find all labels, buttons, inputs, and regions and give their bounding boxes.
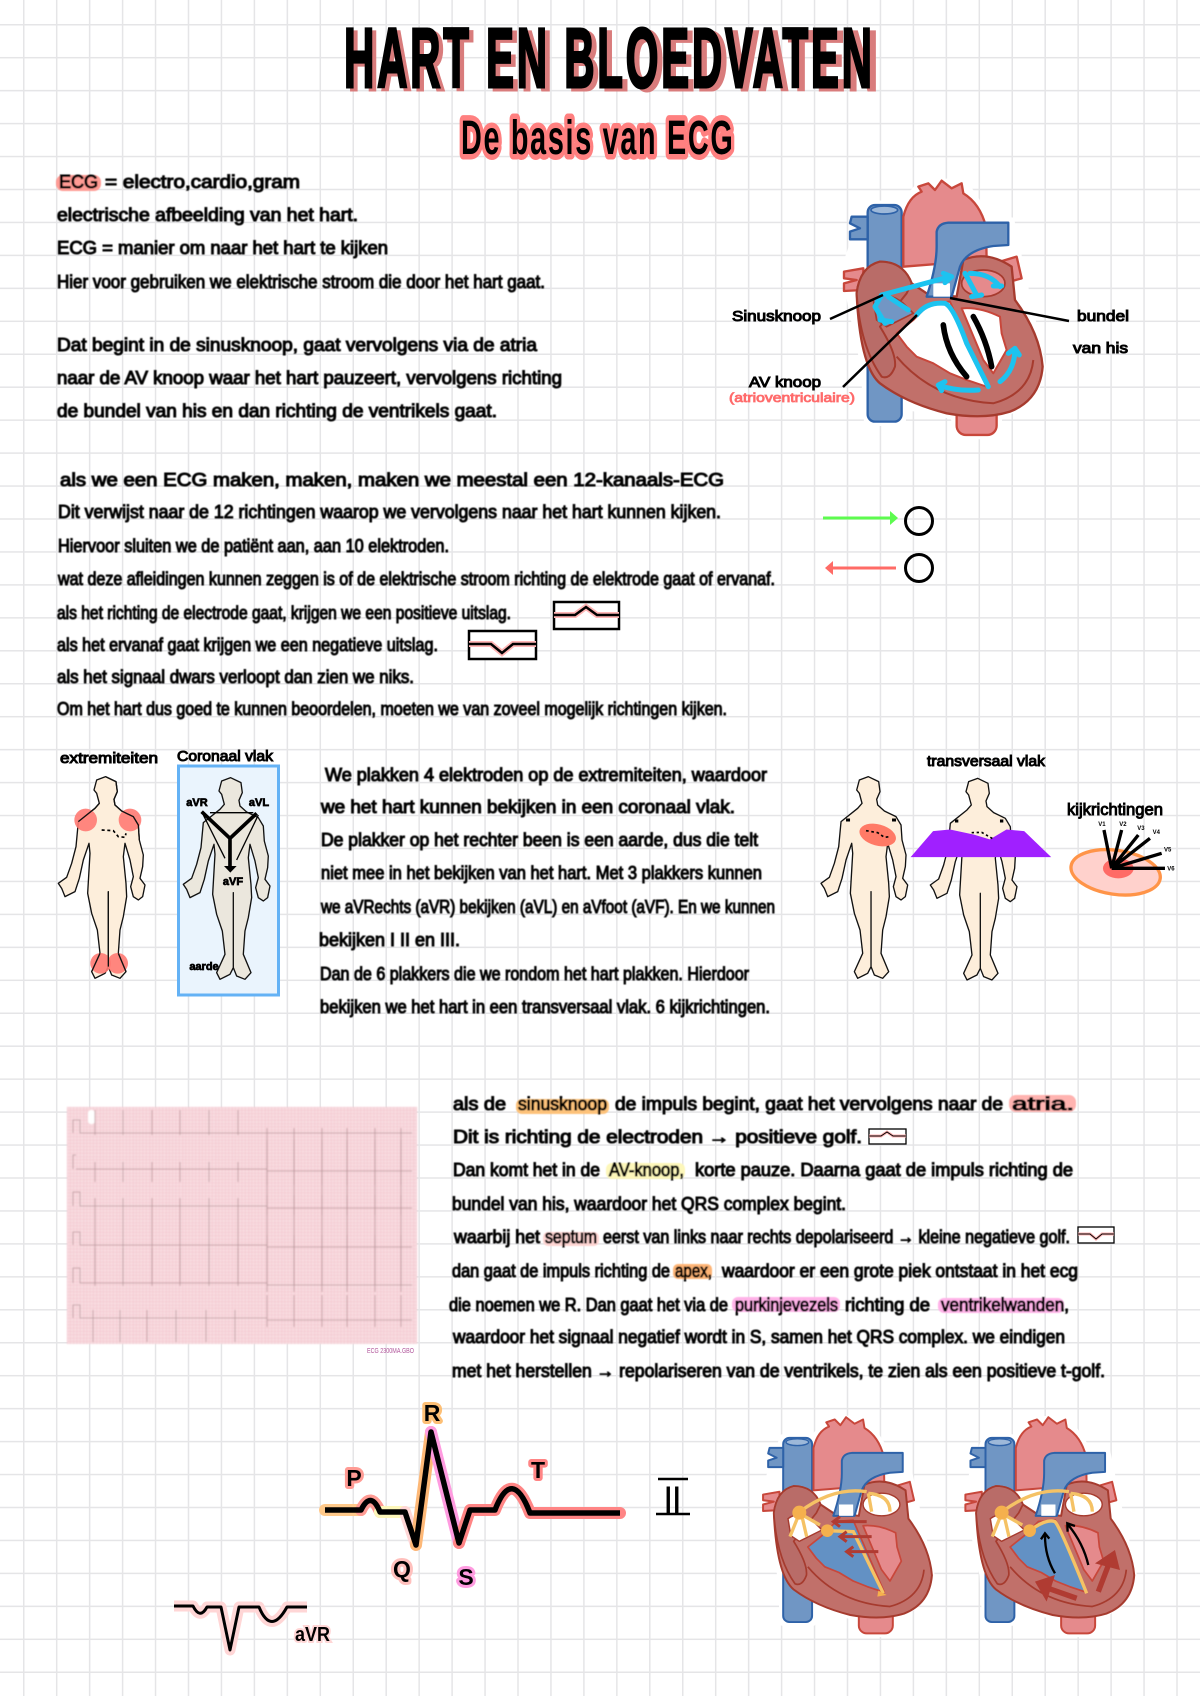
- text block: conduction explanation: richting de: [845, 1295, 930, 1315]
- label: AV knoop: AV knoop: [749, 374, 821, 391]
- label: Q: Q: [393, 1556, 411, 1582]
- text block: electrodes explanation: we het hart kunnen bekijken in een coronaal vlak.: [320, 797, 735, 817]
- text block: what is an ECG: electrische afbeelding van het hart.: [57, 205, 358, 225]
- text block: 12-lead ECG: als het ervanaf gaat krijgen we een negatieve uitslag.: [57, 635, 438, 655]
- icon: small positive deflection: [869, 1129, 906, 1144]
- text block: electrodes explanation: We plakken 4 elektroden op de extremiteiten, waardoor: [325, 765, 767, 785]
- text block: conduction explanation: ventrikelwanden,: [941, 1295, 1069, 1315]
- red septal arrows: [833, 1517, 878, 1557]
- text block: what is an ECG: de bundel van his en dan richting de ventrikels gaat.: [57, 401, 497, 421]
- text block: what is an ECG: ECG: [59, 172, 98, 192]
- text block: what is an ECG: Dat begint in de sinusknoop, gaat vervolgens via de atria: [57, 335, 538, 355]
- label: lead II: [656, 1479, 690, 1522]
- text block: electrodes explanation: bekijken I II en III.: [319, 930, 460, 950]
- text block: 12-lead ECG: Om het hart dus goed te kunnen beoordelen, moeten we van zoveel mogelijk richtingen kijken.: [57, 699, 727, 719]
- highlight: ECG: [56, 175, 101, 191]
- wave highlights: [325, 1432, 620, 1545]
- text block: conduction explanation: de impuls begint, gaat het vervolgens naar de: [615, 1094, 1003, 1114]
- text block: what is an ECG: [56, 172, 562, 421]
- panel: coronal plane: [177, 748, 278, 995]
- figure: body with transverse plane: [912, 778, 1050, 980]
- text block: what is an ECG: naar de AV knoop waar het hart pauzeert, vervolgens richting: [57, 368, 562, 388]
- label: S: S: [458, 1564, 474, 1590]
- text block: 12-lead ECG: Dit verwijst naar de 12 richtingen waarop we vervolgens naar het hart kunnen kijken.: [58, 502, 721, 522]
- text block: what is an ECG: Hier voor gebruiken we elektrische stroom die door het hart gaat.: [57, 272, 545, 292]
- text block: conduction explanation: apex,: [675, 1261, 712, 1281]
- text block: conduction explanation: AV-knoop,: [609, 1160, 684, 1180]
- subtitle: De basis van ECG: [461, 112, 733, 165]
- figure: body with heart location: [821, 777, 908, 978]
- labels: aVR aVL aVF aarde: aarde: [189, 961, 219, 973]
- text block: electrodes explanation: we aVRechts (aVR) bekijken (aVL) en aVfoot (aVF). En we kunnen: [320, 897, 775, 917]
- illustration: heart depolarising septum: [762, 1417, 932, 1635]
- text block: conduction explanation: waardoor er een grote piek ontstaat in het ecg: [721, 1261, 1078, 1281]
- label: bundel van his: van his: [1073, 340, 1128, 357]
- black arrows: [1041, 1523, 1088, 1573]
- labels: aVR aVL aVF aarde: [186, 797, 269, 973]
- text block: 12-lead ECG: wat deze afleidingen kunnen zeggen is of de elektrische stroom richting de elektrode gaat of ervanaf.: [57, 569, 775, 589]
- heading: extremiteiten: extremiteiten: [60, 750, 158, 767]
- text block: 12-lead ECG: als het signaal dwars verloopt dan zien we niks.: [57, 667, 414, 687]
- red wall arrows: [1043, 1557, 1112, 1598]
- text block: conduction explanation: korte pauze. Daarna gaat de impuls richting de: [695, 1160, 1073, 1180]
- conduction arrows: [875, 273, 1019, 391]
- labels: aVR aVL aVF aarde: aVF: [223, 876, 243, 888]
- text block: what is an ECG: = electro,cardio,gram: [105, 172, 300, 192]
- text block: 12-lead ECG: als we een ECG maken, maken, maken we meestal een 12-kanaals-ECG: [60, 470, 724, 490]
- illustration: heart with conduction pathway: [843, 180, 1043, 437]
- icon: red arrow away from electrode: [825, 554, 932, 582]
- text block: electrodes explanation: De plakker op het rechter been is een aarde, dus die telt: [321, 830, 758, 850]
- label: lead II: II: [664, 1480, 681, 1522]
- text block: conduction explanation: dan gaat de impuls richting de: [452, 1261, 670, 1281]
- text block: conduction explanation: waardoor het signaal negatief wordt in S, samen het QRS complex. we eindigen: [452, 1327, 1065, 1347]
- chart: PQRST wave lead II: [325, 1400, 620, 1590]
- illustration: heart depolarising ventricle walls: [965, 1417, 1135, 1635]
- text block: conduction explanation: septum: [545, 1227, 597, 1247]
- icon: negative deflection box: [469, 631, 536, 659]
- text block: electrodes explanation: niet mee in het bekijken van het hart. Met 3 plakkers kunnen: [321, 863, 762, 883]
- text block: conduction explanation: waarbij het: [453, 1227, 540, 1247]
- title: HART EN BLOEDVATEN: [348, 15, 878, 109]
- text block: conduction explanation: purkinjevezels: [735, 1295, 838, 1315]
- label: aVR: aVR: [295, 1624, 331, 1646]
- figure: body with limb electrodes: [58, 777, 145, 978]
- text block: conduction explanation: sinusknoop: [518, 1094, 607, 1114]
- black arrows: [943, 317, 992, 377]
- chart: 12-lead ECG strip: [67, 1107, 417, 1344]
- caption: ECG source: ECG 2300MA.GBO: [367, 1348, 414, 1355]
- heading: transversaal vlak: transversaal vlak: [927, 753, 1046, 770]
- highlights: [516, 1095, 1076, 1313]
- text block: conduction explanation: [449, 1094, 1105, 1381]
- diagram: chest leads directions: V2: [1119, 822, 1127, 828]
- diagram: chest leads directions: V3: [1137, 826, 1145, 832]
- diagram: chest leads directions: V5: [1164, 848, 1172, 854]
- label: AV knoop: [729, 374, 855, 405]
- icon: positive deflection box: [554, 602, 619, 629]
- icon: small negative deflection: [1078, 1227, 1114, 1243]
- diagram: chest leads directions: V4: [1153, 830, 1161, 836]
- chart: aVR wave: [174, 1606, 331, 1650]
- text block: conduction explanation: atria.: [1012, 1094, 1074, 1114]
- label: bundel van his: [1073, 308, 1129, 357]
- figure: body with limb leads: [183, 778, 270, 979]
- labels: aVR aVL aVF aarde: aVR: [186, 797, 208, 809]
- heading: Coronaal vlak: Coronaal vlak: [177, 748, 274, 765]
- text block: conduction explanation: als de: [453, 1094, 506, 1114]
- text block: electrodes explanation: [319, 765, 775, 1017]
- text block: conduction explanation: met het herstellen → repolariseren van de ventrikels, te zien als een positieve t-golf.: [452, 1361, 1105, 1381]
- label: R: R: [424, 1400, 441, 1426]
- title: HART EN BLOEDVATEN: [344, 12, 872, 106]
- text block: conduction explanation: eerst van links naar rechts depolariseerd → kleine negatieve golf.: [603, 1227, 1070, 1247]
- label: T: T: [531, 1457, 545, 1483]
- text block: electrodes explanation: Dan de 6 plakkers die we rondom het hart plakken. Hierdoor: [320, 964, 749, 984]
- diagram: chest leads directions: V6: [1167, 867, 1175, 873]
- text block: conduction explanation: Dan komt het in de: [453, 1160, 600, 1180]
- labels: aVR aVL aVF aarde: aVL: [249, 797, 269, 809]
- text block: electrodes explanation: bekijken we het hart in een transversaal vlak. 6 kijkrichtingen.: [320, 997, 770, 1017]
- icon: green arrow towards electrode: [823, 508, 932, 534]
- label: AV knoop: (atrioventriculaire): [729, 390, 855, 405]
- label: bundel van his: bundel: [1077, 308, 1129, 325]
- diagram: chest leads directions: [1068, 822, 1175, 900]
- text block: what is an ECG: ECG = manier om naar het hart te kijken: [57, 238, 388, 258]
- label: Sinusknoop: Sinusknoop: [732, 308, 821, 325]
- text block: 12-lead ECG: als het richting de electrode gaat, krijgen we een positieve uitslag.: [57, 603, 511, 623]
- text block: conduction explanation: bundel van his, waardoor het QRS complex begint.: [452, 1194, 846, 1214]
- text block: conduction explanation: Dit is richting de electroden → positieve golf.: [453, 1127, 862, 1147]
- wave line: [325, 1432, 620, 1545]
- heart labels: [729, 295, 1129, 405]
- label: P: P: [346, 1465, 362, 1491]
- heading: kijkrichtingen: kijkrichtingen: [1067, 800, 1163, 819]
- text block: 12-lead ECG: Hiervoor sluiten we de patiënt aan, aan 10 elektroden.: [58, 536, 449, 556]
- diagram: chest leads directions: V1: [1098, 822, 1106, 828]
- text block: conduction explanation: die noemen we R. Dan gaat het via de: [449, 1295, 728, 1315]
- text block: 12-lead ECG: [57, 470, 775, 719]
